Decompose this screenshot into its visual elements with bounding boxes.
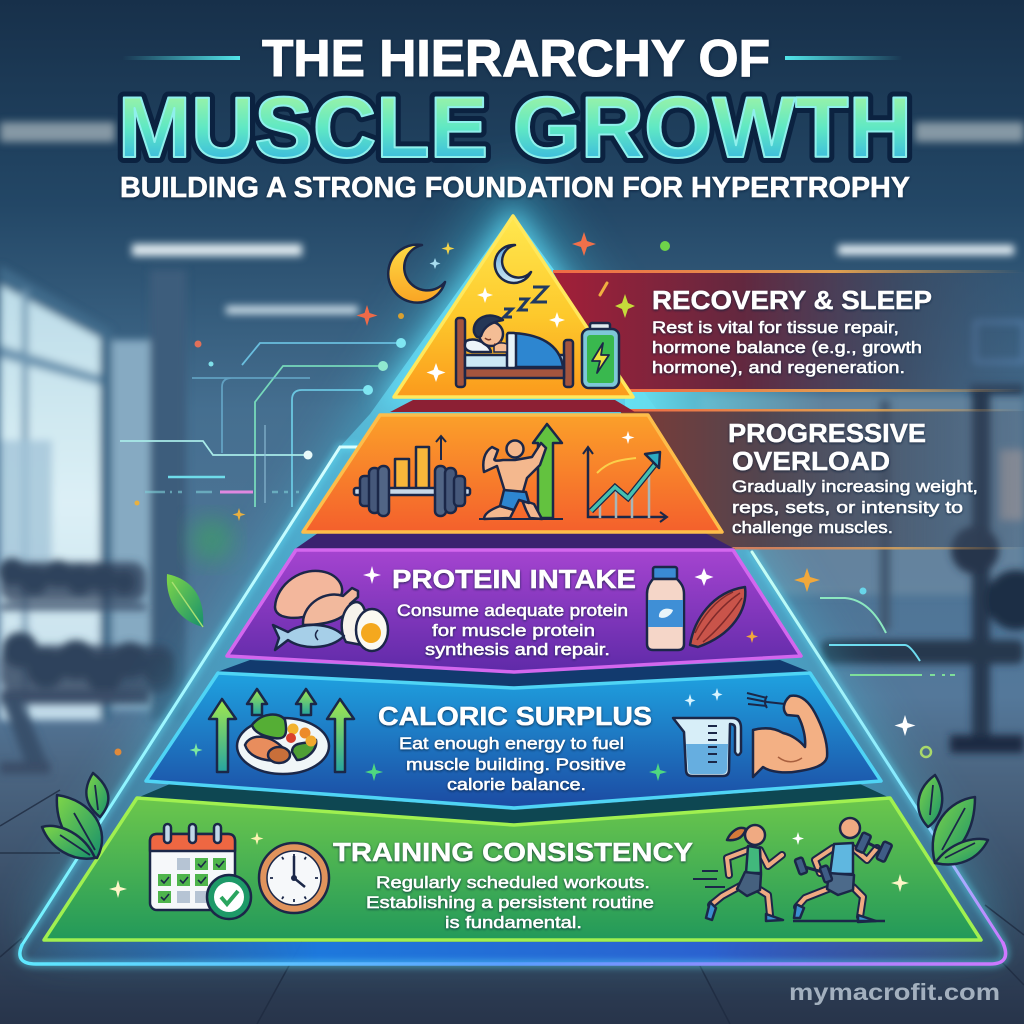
panel: progressive overload bbox=[615, 409, 1024, 550]
heading: RECOVERY & SLEEP bbox=[652, 285, 932, 315]
description: calorie balance. bbox=[447, 775, 586, 794]
description: reps, sets, or intensity to bbox=[732, 498, 963, 517]
description bbox=[732, 477, 978, 537]
icon: growth arrows bbox=[209, 689, 354, 772]
description: hormone balance (e.g., growth bbox=[652, 338, 922, 357]
icon: flexed arm with fork bbox=[747, 693, 827, 777]
pyramid gap: upper bbox=[295, 533, 735, 549]
pyramid gap: middle bbox=[217, 660, 810, 690]
description bbox=[366, 873, 654, 932]
icon: barbell and bars bbox=[354, 436, 470, 516]
icon: battery bbox=[582, 323, 619, 388]
icon: small floating leaf bbox=[167, 574, 203, 627]
tier 5: training consistency bbox=[44, 798, 981, 940]
heading bbox=[728, 418, 926, 476]
title bbox=[118, 30, 912, 204]
description: Eat enough energy to fuel bbox=[399, 734, 624, 753]
description bbox=[397, 601, 628, 659]
icon: right leaf cluster bbox=[918, 775, 988, 864]
sparkles bbox=[363, 566, 758, 643]
pyramid gap: lower bbox=[137, 784, 890, 828]
watermark: mymacrofit.com bbox=[789, 979, 1000, 1005]
icon: sleeping person in bed bbox=[456, 316, 573, 387]
pyramid gap: top bbox=[390, 400, 635, 412]
heading: OVERLOAD bbox=[732, 446, 890, 476]
icon: protein bottle bbox=[647, 567, 684, 650]
description: Gradually increasing weight, bbox=[732, 477, 978, 496]
description: Establishing a persistent routine bbox=[366, 893, 654, 912]
description: synthesis and repair. bbox=[425, 640, 610, 659]
cyan band between panels bbox=[625, 392, 825, 409]
icon: lifter with arrow bbox=[479, 424, 563, 519]
icon: calendar bbox=[150, 824, 251, 919]
tier 2: progressive overload bbox=[303, 415, 722, 532]
title line two: MUSCLE GROWTH bbox=[118, 80, 912, 176]
heading: PROGRESSIVE bbox=[728, 418, 926, 448]
description: Regularly scheduled workouts. bbox=[376, 873, 650, 892]
circuit lines right bbox=[820, 588, 955, 757]
description: Consume adequate protein bbox=[397, 601, 628, 620]
panel: recovery and sleep bbox=[553, 270, 1024, 392]
decorative pyramid outline bbox=[20, 205, 1006, 964]
title line two: MUSCLE GROWTH bbox=[118, 80, 912, 176]
circuit lines left bbox=[120, 338, 406, 507]
floating sparkles bbox=[114, 232, 916, 756]
tier 1: recovery bbox=[394, 216, 633, 397]
icon: woman runner bbox=[693, 825, 783, 921]
heading: CALORIC SURPLUS bbox=[378, 701, 652, 731]
sparkles bbox=[109, 832, 909, 898]
icon: clock bbox=[259, 843, 329, 913]
icon: inner moon bbox=[495, 245, 531, 283]
description bbox=[652, 318, 922, 377]
icon: man runner with dumbbells bbox=[793, 818, 892, 922]
description: for muscle protein bbox=[432, 621, 595, 640]
description: challenge muscles. bbox=[732, 518, 893, 537]
icon: meal plate bbox=[237, 715, 329, 774]
icon: muscle fibre bbox=[690, 587, 745, 647]
icon: growth chart bbox=[583, 447, 667, 522]
title line one: THE HIERARCHY OF bbox=[262, 30, 770, 88]
sparkles bbox=[426, 287, 565, 382]
icon: measuring jug bbox=[673, 718, 741, 776]
heading: PROTEIN INTAKE bbox=[392, 564, 636, 594]
heading: TRAINING CONSISTENCY bbox=[333, 837, 693, 867]
tier 3: protein intake bbox=[227, 550, 801, 672]
description: hormone), and regeneration. bbox=[652, 358, 905, 377]
title rule right bbox=[785, 56, 903, 60]
icon: zzz bbox=[504, 287, 547, 317]
description: Rest is vital for tissue repair, bbox=[652, 318, 899, 337]
description: muscle building. Positive bbox=[406, 755, 626, 774]
tier 4: caloric surplus bbox=[146, 673, 881, 808]
icon: outer moon bbox=[388, 245, 445, 303]
title rule left bbox=[122, 56, 240, 60]
icon: left leaf cluster bbox=[42, 773, 108, 859]
description: is fundamental. bbox=[445, 913, 582, 932]
description bbox=[399, 734, 626, 794]
subtitle: BUILDING A STRONG FOUNDATION FOR HYPERTROPHY bbox=[120, 172, 910, 204]
sparkles bbox=[622, 431, 634, 444]
icon: chicken, fish and eggs bbox=[273, 571, 388, 651]
sparkles bbox=[190, 688, 722, 781]
